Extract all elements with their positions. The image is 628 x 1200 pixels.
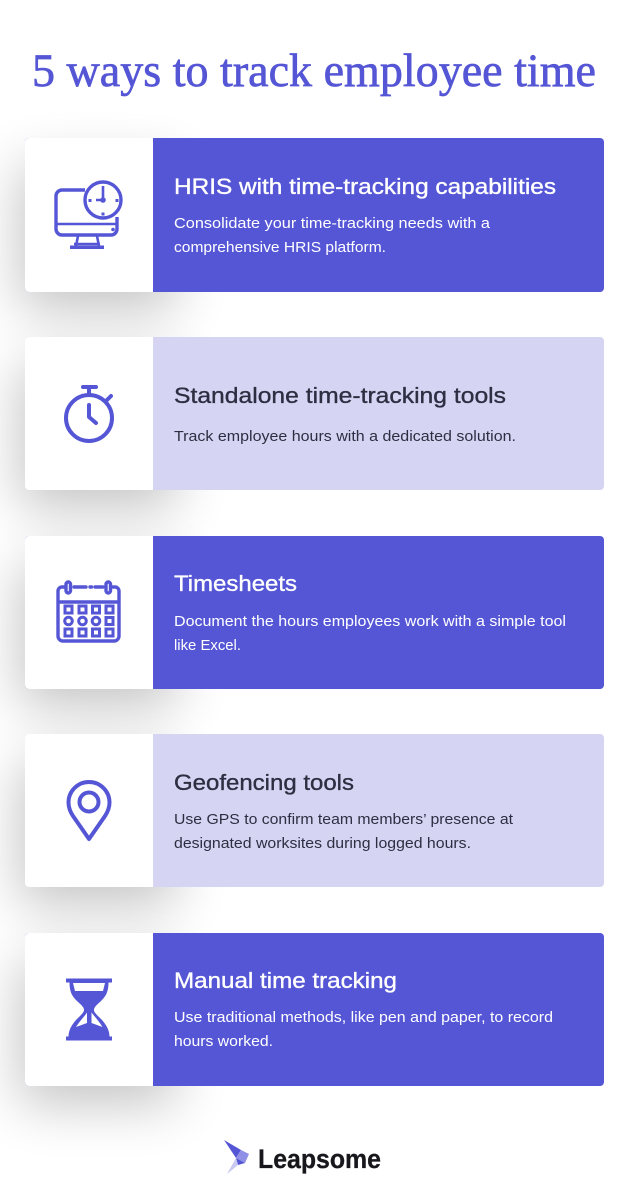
card 3: timesheets bbox=[20, 536, 604, 707]
card 1: HRIS bbox=[20, 138, 604, 310]
icon: stopwatch bbox=[66, 387, 112, 441]
title: 5 ways to track employee time bbox=[32, 45, 596, 97]
icon: monitor with clock bbox=[56, 182, 121, 249]
card 5: manual tracking bbox=[20, 933, 604, 1104]
heading: Manual time tracking bbox=[174, 968, 397, 993]
description: like Excel. bbox=[174, 637, 241, 654]
card 4: geofencing bbox=[20, 734, 604, 905]
description: designated worksites during logged hours. bbox=[174, 835, 471, 852]
description: comprehensive HRIS platform. bbox=[174, 239, 386, 256]
icon: hourglass bbox=[66, 978, 112, 1040]
icon: calendar bbox=[58, 582, 119, 641]
description: Track employee hours with a dedicated solution. bbox=[174, 428, 516, 445]
description: Document the hours employees work with a simple tool bbox=[174, 613, 566, 630]
heading: Standalone time-tracking tools bbox=[174, 383, 506, 408]
icon: Leapsome bird bbox=[224, 1140, 249, 1174]
logo: Leapsome bbox=[224, 1140, 381, 1174]
heading: Timesheets bbox=[174, 571, 297, 596]
heading: Geofencing tools bbox=[174, 770, 354, 795]
heading: HRIS with time-tracking capabilities bbox=[174, 174, 556, 199]
description: Consolidate your time-tracking needs with a bbox=[174, 215, 491, 232]
wordmark: Leapsome bbox=[258, 1144, 381, 1174]
icon: location pin bbox=[68, 782, 110, 839]
card 2: standalone tools bbox=[20, 337, 604, 508]
description: Use traditional methods, like pen and paper, to record bbox=[174, 1009, 553, 1026]
description: hours worked. bbox=[174, 1033, 273, 1050]
description: Use GPS to confirm team members’ presence at bbox=[174, 811, 514, 828]
